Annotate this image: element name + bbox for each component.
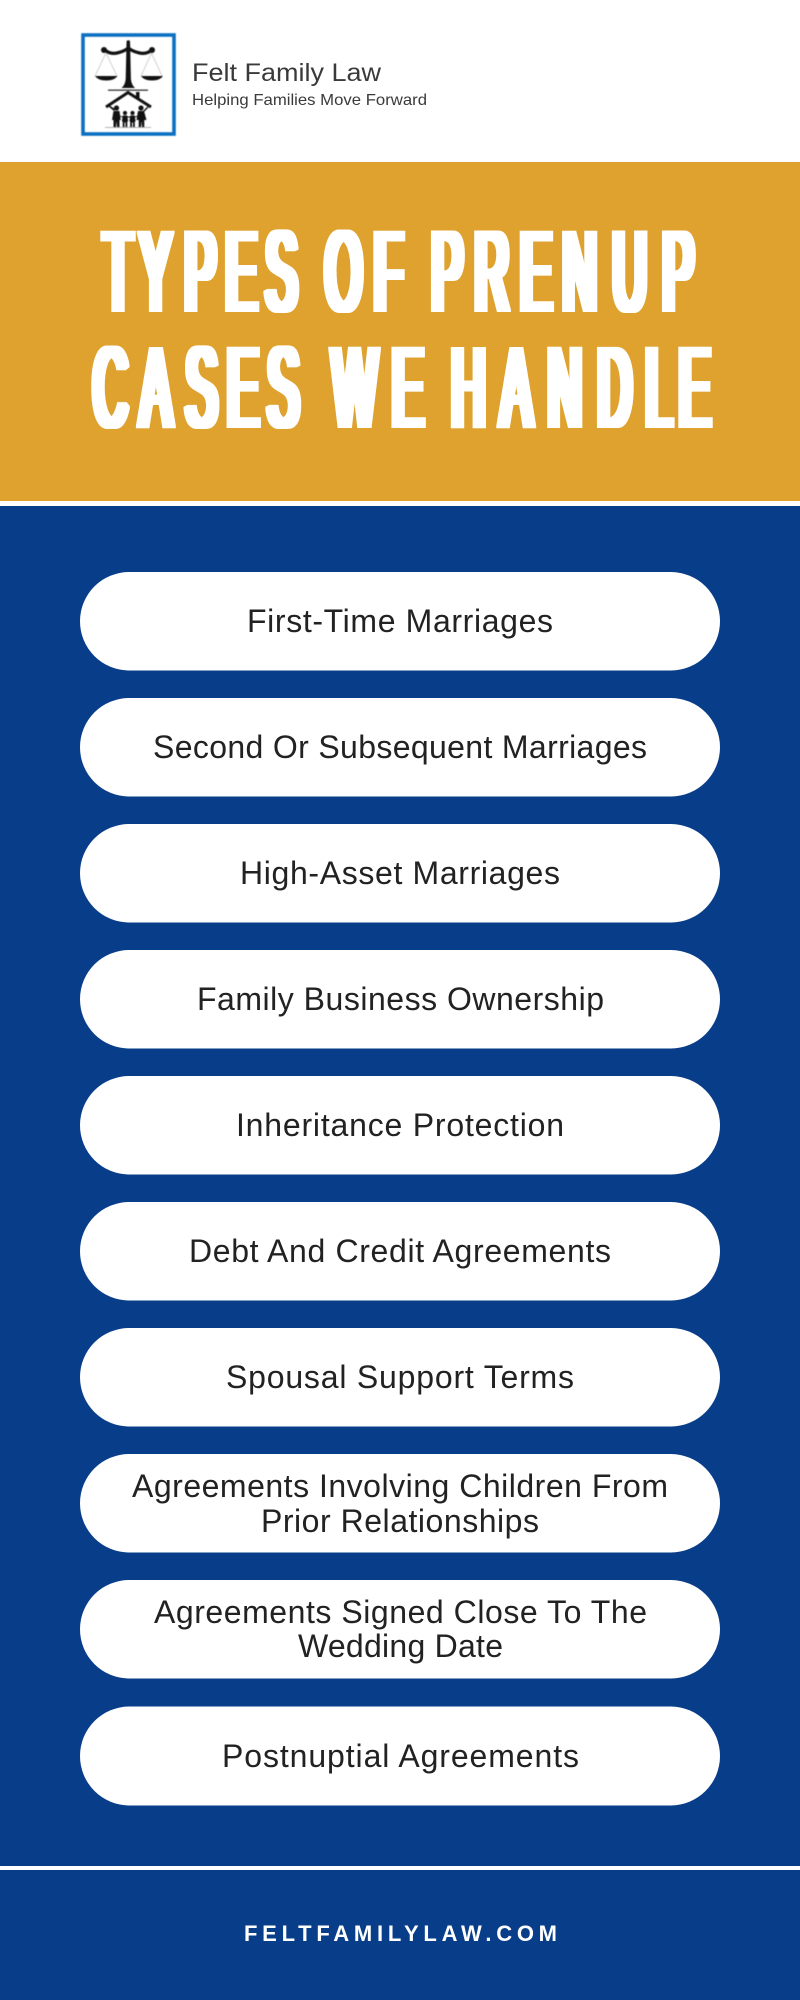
pill: Agreements Involving Children From Prior Relationships: Agreements Involving Children From [132,1468,668,1504]
panel: footer [0,1870,800,2000]
company name: Felt Family Law [192,59,382,87]
pill: Postnuptial Agreements: Postnuptial Agreements [222,1738,579,1774]
pill: Spousal Support Terms [80,1328,720,1426]
pill: Inheritance Protection [80,1076,720,1174]
pill: Spousal Support Terms: Spousal Support Terms [226,1359,574,1395]
pill: Agreements Involving Children From Prior Relationships: Prior Relationships [261,1503,539,1539]
pill: High-Asset Marriages: High-Asset Marriages [240,855,560,891]
pill: Family Business Ownership [80,950,720,1048]
pill: Debt And Credit Agreements: Debt And Credit Agreements [189,1233,611,1269]
panel: case types list [0,506,800,1866]
pill: Family Business Ownership: Family Business Ownership [197,981,604,1017]
title [93,206,710,452]
pill: Debt And Credit Agreements [80,1202,720,1300]
logo icon: scales of justice over a house and family [83,35,174,134]
title: TYPES OF PRENUP [104,206,694,336]
pill: Inheritance Protection: Inheritance Protection [236,1107,564,1143]
website address: FELTFAMILYLAW.COM [244,1921,557,1946]
panel: title banner [0,162,800,501]
pill: First-Time Marriages [80,572,720,670]
pill: Second Or Subsequent Marriages [80,698,720,796]
tagline: Helping Families Move Forward [192,92,427,109]
pill: Agreements Involving Children From Prior Relationships [80,1454,720,1552]
pill: Agreements Signed Close To The Wedding Date [80,1580,720,1678]
title: CASES WE HANDLE [93,322,710,452]
pill: First-Time Marriages: First-Time Marriages [247,603,553,639]
panel: logo header [83,35,427,134]
pill: Agreements Signed Close To The Wedding Date: Wedding Date [298,1628,503,1664]
pill: High-Asset Marriages [80,824,720,922]
pill: Agreements Signed Close To The Wedding Date: Agreements Signed Close To The [154,1594,647,1630]
pill: Postnuptial Agreements [80,1706,720,1806]
pill: Second Or Subsequent Marriages: Second Or Subsequent Marriages [153,729,647,765]
